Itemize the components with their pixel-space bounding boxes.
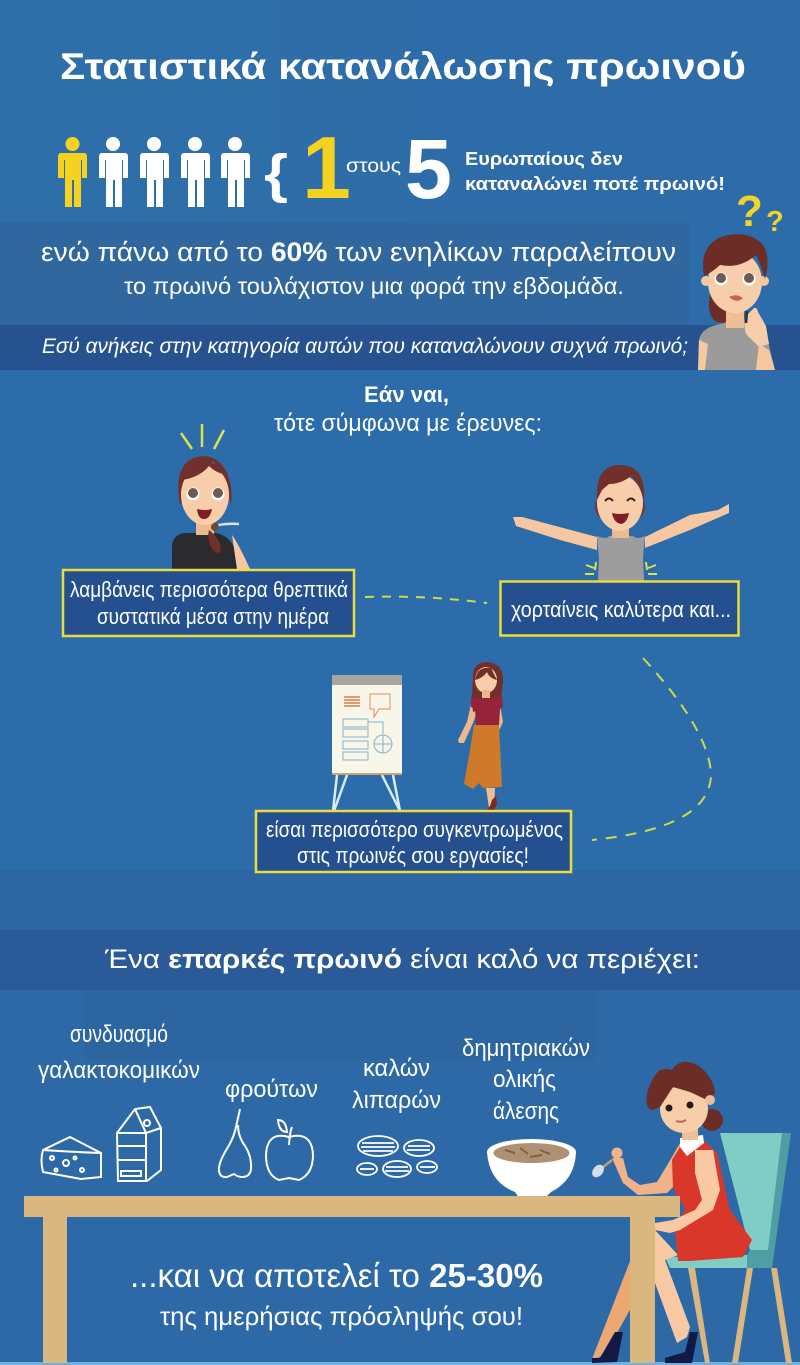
illustration: thinking woman (698, 187, 784, 370)
icon: apple (266, 1120, 313, 1180)
far leg (592, 1256, 655, 1359)
heading: if yes: Εάν ναι, (364, 382, 449, 407)
band: question (0, 325, 800, 370)
arrow: dashed connector 1 (365, 597, 487, 603)
heading: if yes: τότε σύμφωνα με έρευνες: (274, 410, 542, 437)
band: adequate breakfast heading: Ένα επαρκές πρωινό είναι καλό να περιέχει: (104, 944, 700, 974)
box: more focused: είσαι περισσότερο συγκεντρωμένος (266, 817, 563, 842)
icon: white person 4 (181, 137, 210, 207)
icon: nuts (357, 1136, 437, 1177)
illustration: flip chart (332, 675, 402, 811)
band: adequate breakfast heading (0, 930, 800, 990)
face (660, 1085, 708, 1133)
statistic: 1: 1 (302, 118, 351, 217)
dress (672, 1140, 752, 1261)
text: 60 percent: το πρωινό τουλάχιστον μια φορά την εβδομάδα. (124, 273, 624, 299)
box: more nutrients: συστατικά μέσα στην ημέρα (97, 604, 329, 629)
box: more focused: στις πρωινές σου εργασίες! (297, 843, 529, 868)
near arm (655, 1150, 720, 1233)
spoon (602, 1160, 612, 1168)
statistic: στους: στους (346, 156, 401, 177)
title: Στατιστικά κατανάλωσης πρωινού (60, 46, 746, 87)
icon: milk carton (117, 1107, 161, 1181)
icon: yellow person (58, 137, 87, 207)
band: question: Εσύ ανήκεις στην κατηγορία αυτών που καταναλώνουν συχνά πρωινό; (42, 335, 688, 358)
illustration: standing woman (458, 662, 503, 814)
icon: pear (219, 1109, 251, 1177)
labels: whole grains: ολικής (493, 1066, 556, 1093)
text: 25-30 percent: ...και να αποτελεί το 25-30% (130, 1257, 543, 1294)
statistic: 5: 5 (405, 122, 452, 216)
icon: white person 2 (99, 137, 128, 207)
collar (680, 1135, 704, 1156)
label: fruit: φρούτων (225, 1076, 318, 1103)
heading: if yes (274, 382, 542, 437)
brace: { (264, 144, 288, 204)
text: Europeans (465, 149, 725, 194)
labels: good fats: καλών (363, 1055, 430, 1082)
icon: cheese (42, 1137, 101, 1179)
chair (665, 1133, 792, 1363)
text: Europeans: καταναλώνει ποτέ πρωινό! (465, 174, 725, 194)
illustration: woman eating (172, 424, 250, 569)
box: more nutrients: λαμβάνεις περισσότερα θρεπτικά (70, 577, 348, 602)
labels: whole grains: δημητριακών (462, 1035, 590, 1062)
shoes (592, 1332, 698, 1363)
illustration: thinking woman: ? (736, 187, 763, 236)
labels: good fats: λιπαρών (352, 1087, 441, 1114)
text: Europeans: Ευρωπαίους δεν (465, 149, 623, 169)
labels: whole grains (462, 1035, 590, 1125)
illustration: happy woman with raised arms (513, 465, 729, 581)
icon: white person 3 (140, 137, 169, 207)
labels: dairy (38, 1021, 200, 1084)
illustration: thinking woman: ? (766, 206, 784, 238)
text: 60 percent (41, 237, 676, 299)
box: more focused (256, 811, 571, 872)
box: fuller: χορταίνεις καλύτερα και... (511, 597, 731, 622)
box: more nutrients (63, 570, 354, 636)
far arm (612, 1143, 680, 1195)
box: fuller (500, 582, 738, 636)
icon: row of five people (58, 137, 250, 207)
icon: white person 5 (221, 137, 250, 207)
near leg (655, 1230, 690, 1343)
text: of daily intake: της ημερήσιας πρόσληψής σου! (160, 1301, 523, 1331)
text: 60 percent: ενώ πάνω από το 60% των ενηλίκων παραλείπουν (41, 237, 676, 267)
labels: whole grains: άλεσης (493, 1098, 559, 1125)
hair bun (701, 1109, 723, 1131)
illustration: cereal bowl (487, 1139, 576, 1199)
labels: good fats (352, 1055, 441, 1114)
hair (646, 1062, 715, 1110)
labels: dairy: συνδυασμό (70, 1021, 168, 1048)
illustration: table (24, 1196, 680, 1363)
illustration: seated woman on chair (590, 1062, 792, 1363)
arrow: dashed connector 2 (592, 658, 711, 840)
labels: dairy: γαλακτοκομικών (38, 1057, 200, 1084)
